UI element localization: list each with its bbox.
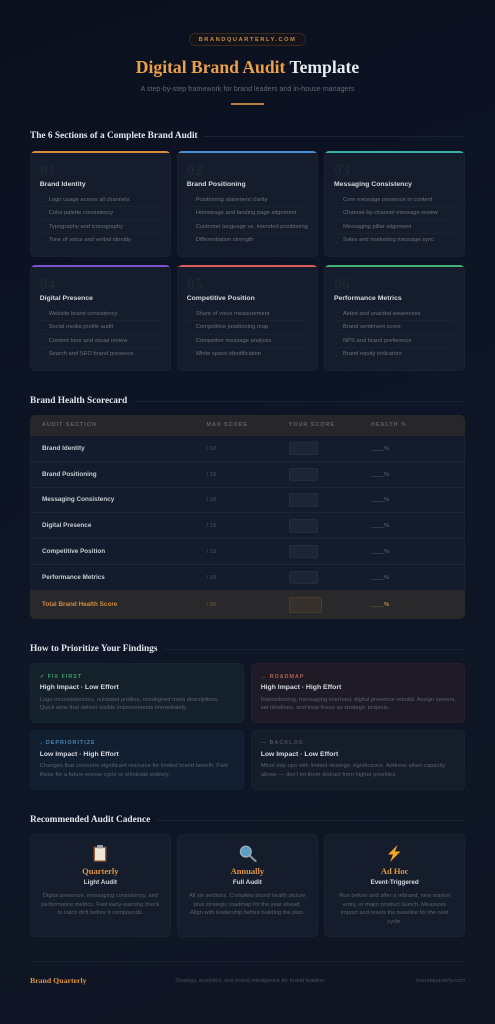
panel: ad hoc: cycle. <box>387 919 402 925</box>
panel: backlog: Low Impact · Low Effort <box>261 751 338 758</box>
panel: brand positioning: Brand Positioning <box>187 181 246 188</box>
panel: brand identity: 01 <box>40 162 55 179</box>
panel: roadmap: set timelines, and treat these as strategic projects. <box>261 705 390 711</box>
row: brand positioning: ____% <box>371 472 389 478</box>
panel: backlog: — BACKLOG <box>261 740 304 746</box>
panel: backlog: allows — don't let them distract from higher priorities. <box>261 772 397 778</box>
panel: messaging consistency: → <box>334 226 338 231</box>
panel: annually: Full Audit <box>233 879 262 886</box>
row: total score <box>30 590 465 619</box>
panel: messaging consistency: Messaging pillar alignment <box>343 224 411 230</box>
panel: quarterly: to catch drift before it compounds. <box>58 910 143 916</box>
panel: roadmap <box>251 663 465 723</box>
row: competitive position <box>30 539 465 565</box>
panel: digital presence: Website brand consistency <box>49 311 117 317</box>
icon: clipboard <box>94 845 106 862</box>
row: brand identity <box>30 436 465 462</box>
panel: brand identity <box>30 151 171 257</box>
heading: prioritize: How to Prioritize Your Findings <box>30 644 157 654</box>
panel: competitive position: → <box>187 313 191 318</box>
panel: competitive position: 05 <box>187 276 202 293</box>
panel: digital presence: 04 <box>40 276 55 293</box>
panel: performance metrics: Brand equity indicators <box>343 351 402 357</box>
scorecard table <box>30 415 465 619</box>
panel: digital presence: Digital Presence <box>40 295 93 302</box>
subtitle: A step-by-step framework for brand leaders and in-house managers <box>141 85 354 93</box>
panel: brand positioning: Homepage and landing page alignment <box>196 210 296 216</box>
panel: brand identity: → <box>40 199 44 204</box>
row: brand identity: / 10 <box>206 446 216 452</box>
panel: competitive position: Competitive Position <box>187 295 255 302</box>
panel: brand positioning: → <box>187 199 191 204</box>
panel: annually: Annually <box>231 866 264 876</box>
panel: messaging consistency: 03 <box>334 162 350 179</box>
row: brand positioning: Brand Positioning <box>42 471 97 478</box>
panel: performance metrics: Brand sentiment score <box>343 324 401 330</box>
panel: quarterly <box>30 834 171 937</box>
panel: competitive position: → <box>187 340 191 345</box>
panel: backlog <box>251 730 465 790</box>
panel: messaging consistency: → <box>334 199 338 204</box>
panel: competitive position: Competitor message analysis <box>196 338 271 344</box>
heading: cadence: Recommended Audit Cadence <box>30 815 150 825</box>
panel: deprioritize <box>30 730 244 790</box>
icon: magnifying glass <box>240 846 257 862</box>
row: messaging consistency <box>30 488 465 513</box>
panel: deprioritize: Changes that consume significant resource for limited brand benefit. Park <box>40 763 228 769</box>
panel: quarterly: Quarterly <box>82 866 119 876</box>
row: digital presence <box>30 513 465 539</box>
panel: digital presence: Content tone and visual review <box>49 338 128 344</box>
panel: ad hoc: Ad Hoc <box>381 866 408 876</box>
panel: brand positioning <box>177 151 318 257</box>
panel: messaging consistency: Channel-by-channel message review <box>343 210 438 216</box>
panel: brand identity: Typography and iconography <box>49 224 123 230</box>
panel: roadmap: → ROADMAP <box>261 674 304 680</box>
row: total score: ____% <box>371 602 389 608</box>
panel: brand positioning: → <box>187 212 191 217</box>
row: performance metrics <box>30 565 465 591</box>
panel: deprioritize: Low Impact · High Effort <box>40 751 119 758</box>
panel: brand positioning: Positioning statement clarity <box>196 197 267 203</box>
footer url: brandquarterly.com <box>416 978 465 984</box>
panel: performance metrics: → <box>334 326 338 331</box>
panel: deprioritize: ↓ DEPRIORITIZE <box>40 740 96 746</box>
panel: fix first: Quick wins that deliver visible improvements immediately. <box>40 705 187 711</box>
panel: deprioritize: these for a future review cycle or eliminate entirely. <box>40 772 170 778</box>
panel: fix first: ✓ FIX FIRST <box>40 674 82 680</box>
panel: performance metrics: 06 <box>334 276 350 293</box>
panel: digital presence: → <box>40 340 44 345</box>
panel: messaging consistency: → <box>334 212 338 217</box>
row: competitive position: Competitive Position <box>42 548 105 555</box>
panel: competitive position: → <box>187 353 191 358</box>
panel: brand identity: Logo usage across all channels <box>49 197 129 203</box>
panel: performance metrics: → <box>334 340 338 345</box>
heading: scorecard: Brand Health Scorecard <box>30 396 127 406</box>
accent divider <box>231 103 264 105</box>
panel: brand identity: → <box>40 212 44 217</box>
panel: quarterly: Light Audit <box>84 879 117 886</box>
panel: brand positioning: → <box>187 226 191 231</box>
panel: roadmap: High Impact · High Effort <box>261 684 341 691</box>
panel: ad hoc: impact and resets the baseline for the next <box>341 910 448 916</box>
panel: digital presence <box>30 265 171 371</box>
panel: ad hoc: entry, or major product launch. Measures <box>343 902 446 908</box>
panel: annually: Align with leadership before building the plan. <box>190 910 305 916</box>
row: performance metrics: / 15 <box>206 575 216 581</box>
panel: messaging consistency: → <box>334 239 338 244</box>
row: messaging consistency: ____% <box>371 497 389 503</box>
panel: brand positioning: 02 <box>187 162 202 179</box>
panel: digital presence: → <box>40 353 44 358</box>
panel: digital presence: Search and SEO brand presence <box>49 351 134 357</box>
panel: annually: All six sections. Complete brand health picture <box>189 893 306 899</box>
panel: brand identity: Brand Identity <box>40 181 86 188</box>
panel: performance metrics: Performance Metrics <box>334 295 402 302</box>
panel: competitive position: → <box>187 326 191 331</box>
panel: digital presence: Social media profile audit <box>49 324 113 330</box>
panel: performance metrics: Aided and unaided awareness <box>343 311 421 317</box>
panel: performance metrics: → <box>334 313 338 318</box>
panel: performance metrics: NPS and brand preference <box>343 338 412 344</box>
title: Digital Brand Audit Template <box>136 57 359 77</box>
panel: brand identity: Tone of voice and verbal identity <box>49 237 131 243</box>
panel: brand positioning: Customer language vs. intended positioning <box>196 224 308 230</box>
panel: competitive position: White space identification <box>196 351 261 357</box>
table header <box>30 415 465 436</box>
panel: ad hoc <box>324 834 465 937</box>
panel: fix first: Logo inconsistencies, outdated profiles, misaligned meta descriptions. <box>40 697 219 703</box>
row: competitive position: ____% <box>371 549 389 555</box>
panel: competitive position <box>177 265 318 371</box>
row: brand positioning: / 15 <box>206 472 216 478</box>
table header: AUDIT SECTION <box>42 422 97 428</box>
panel: performance metrics <box>324 265 465 371</box>
panel: quarterly: performance metrics. Fast early-warning check <box>41 902 159 908</box>
panel: ad hoc: Event-Triggered <box>370 879 419 886</box>
footer tagline: Strategy, analytics, and brand intelligence for brand leaders <box>175 978 324 984</box>
row: performance metrics: Performance Metrics <box>42 574 105 581</box>
panel: fix first <box>30 663 244 723</box>
row: digital presence: Digital Presence <box>42 522 91 529</box>
panel: fix first: High Impact · Low Effort <box>40 684 119 691</box>
row: brand identity: ____% <box>371 446 389 452</box>
panel: ad hoc: Run before and after a rebrand, new market <box>339 893 450 899</box>
panel: messaging consistency: Sales and marketing message sync <box>343 237 434 243</box>
panel: brand identity: → <box>40 239 44 244</box>
heading: six sections: The 6 Sections of a Complete Brand Audit <box>30 131 198 141</box>
row: brand identity: Brand Identity <box>42 445 85 452</box>
row: brand positioning <box>30 462 465 488</box>
panel: performance metrics: → <box>334 353 338 358</box>
header badge <box>189 33 306 46</box>
row: messaging consistency: / 10 <box>206 497 216 503</box>
panel: digital presence: → <box>40 326 44 331</box>
panel: brand identity: → <box>40 226 44 231</box>
table header: HEALTH % <box>371 422 407 428</box>
icon: lightning bolt <box>388 845 400 862</box>
panel: quarterly: Digital presence, messaging consistency, and <box>43 893 158 899</box>
panel: messaging consistency <box>324 151 465 257</box>
header badge: BRANDQUARTERLY.COM <box>199 37 296 43</box>
row: total score: / 80 <box>206 602 216 608</box>
table header: MAX SCORE <box>206 422 248 428</box>
row: performance metrics: ____% <box>371 575 389 581</box>
panel: digital presence: → <box>40 313 44 318</box>
row: total score: Total Brand Health Score <box>42 601 117 608</box>
panel: brand positioning: Differentiation strength <box>196 237 254 243</box>
panel: brand identity: Color palette consistency <box>49 210 113 216</box>
table header: YOUR SCORE <box>289 422 335 428</box>
footer brand: Brand Quarterly <box>30 976 87 985</box>
panel: brand positioning: → <box>187 239 191 244</box>
panel: annually <box>177 834 318 937</box>
panel: roadmap: Repositioning, messaging overhaul, digital presence rebuild. Assign owners, <box>261 697 456 703</box>
row: messaging consistency: Messaging Consistency <box>42 496 114 503</box>
panel: annually: plus strategic roadmap for the year ahead. <box>194 902 301 908</box>
panel: competitive position: Share of voice measurement <box>196 311 269 317</box>
row: digital presence: ____% <box>371 523 389 529</box>
panel: backlog: Minor tidy-ups with limited strategic significance. Address when capacity <box>261 763 445 769</box>
panel: messaging consistency: Core message presence in content <box>343 197 432 203</box>
row: competitive position: / 15 <box>206 549 216 555</box>
panel: messaging consistency: Messaging Consistency <box>334 181 412 188</box>
row: digital presence: / 15 <box>206 523 216 529</box>
panel: competitive position: Competitive positioning map <box>196 324 268 330</box>
